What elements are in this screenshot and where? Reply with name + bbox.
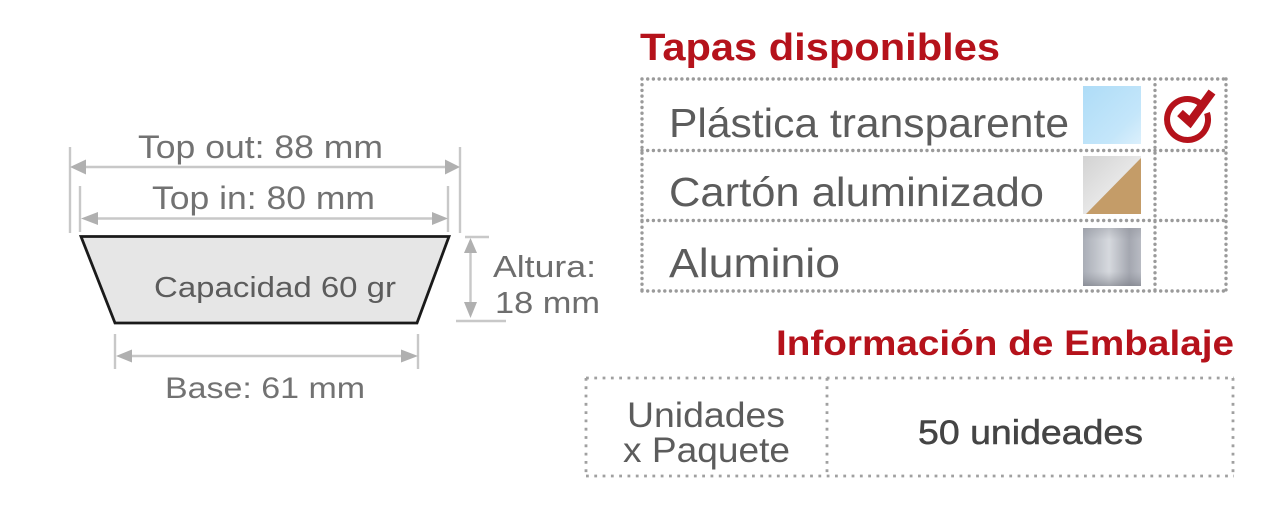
label: capacity: Capacidad 60 gr	[154, 272, 396, 304]
container cross-section	[81, 236, 449, 323]
icon: red check mark	[1167, 92, 1212, 140]
swatch: transparent plastic	[1083, 86, 1141, 144]
panel: packaging table	[586, 378, 1234, 476]
dimension: top out	[70, 129, 460, 233]
dimension: height: Altura:	[493, 249, 596, 284]
row label: aluminized cardboard: Cartón aluminizado	[669, 169, 1044, 215]
panel: packaging table: x Paquete	[623, 431, 790, 470]
dimension: top in: Top in: 80 mm	[152, 180, 375, 216]
panel: lids table	[642, 79, 1227, 291]
cell label: units per pack: Unidades	[627, 396, 785, 435]
row label: transparent plastic: Plástica transparente	[669, 100, 1069, 146]
dimension: base	[115, 334, 418, 405]
row label: aluminium: Aluminio	[669, 240, 840, 286]
swatch: aluminized cardboard	[1083, 156, 1141, 214]
heading: Tapas disponibles: Tapas disponibles	[640, 27, 1000, 69]
dimension: height	[456, 237, 600, 321]
dimension: top out: Top out: 88 mm	[138, 129, 383, 165]
swatch: aluminium	[1083, 228, 1141, 286]
heading: Información de Embalaje: Información de Embalaje	[776, 324, 1234, 363]
dimension: top in	[80, 180, 448, 232]
cell value: units: 50 unideades	[918, 414, 1143, 452]
panel: cup dimensions diagram	[70, 129, 600, 405]
dimension: height: 18 mm	[495, 285, 600, 320]
dimension: base: Base: 61 mm	[165, 372, 365, 405]
